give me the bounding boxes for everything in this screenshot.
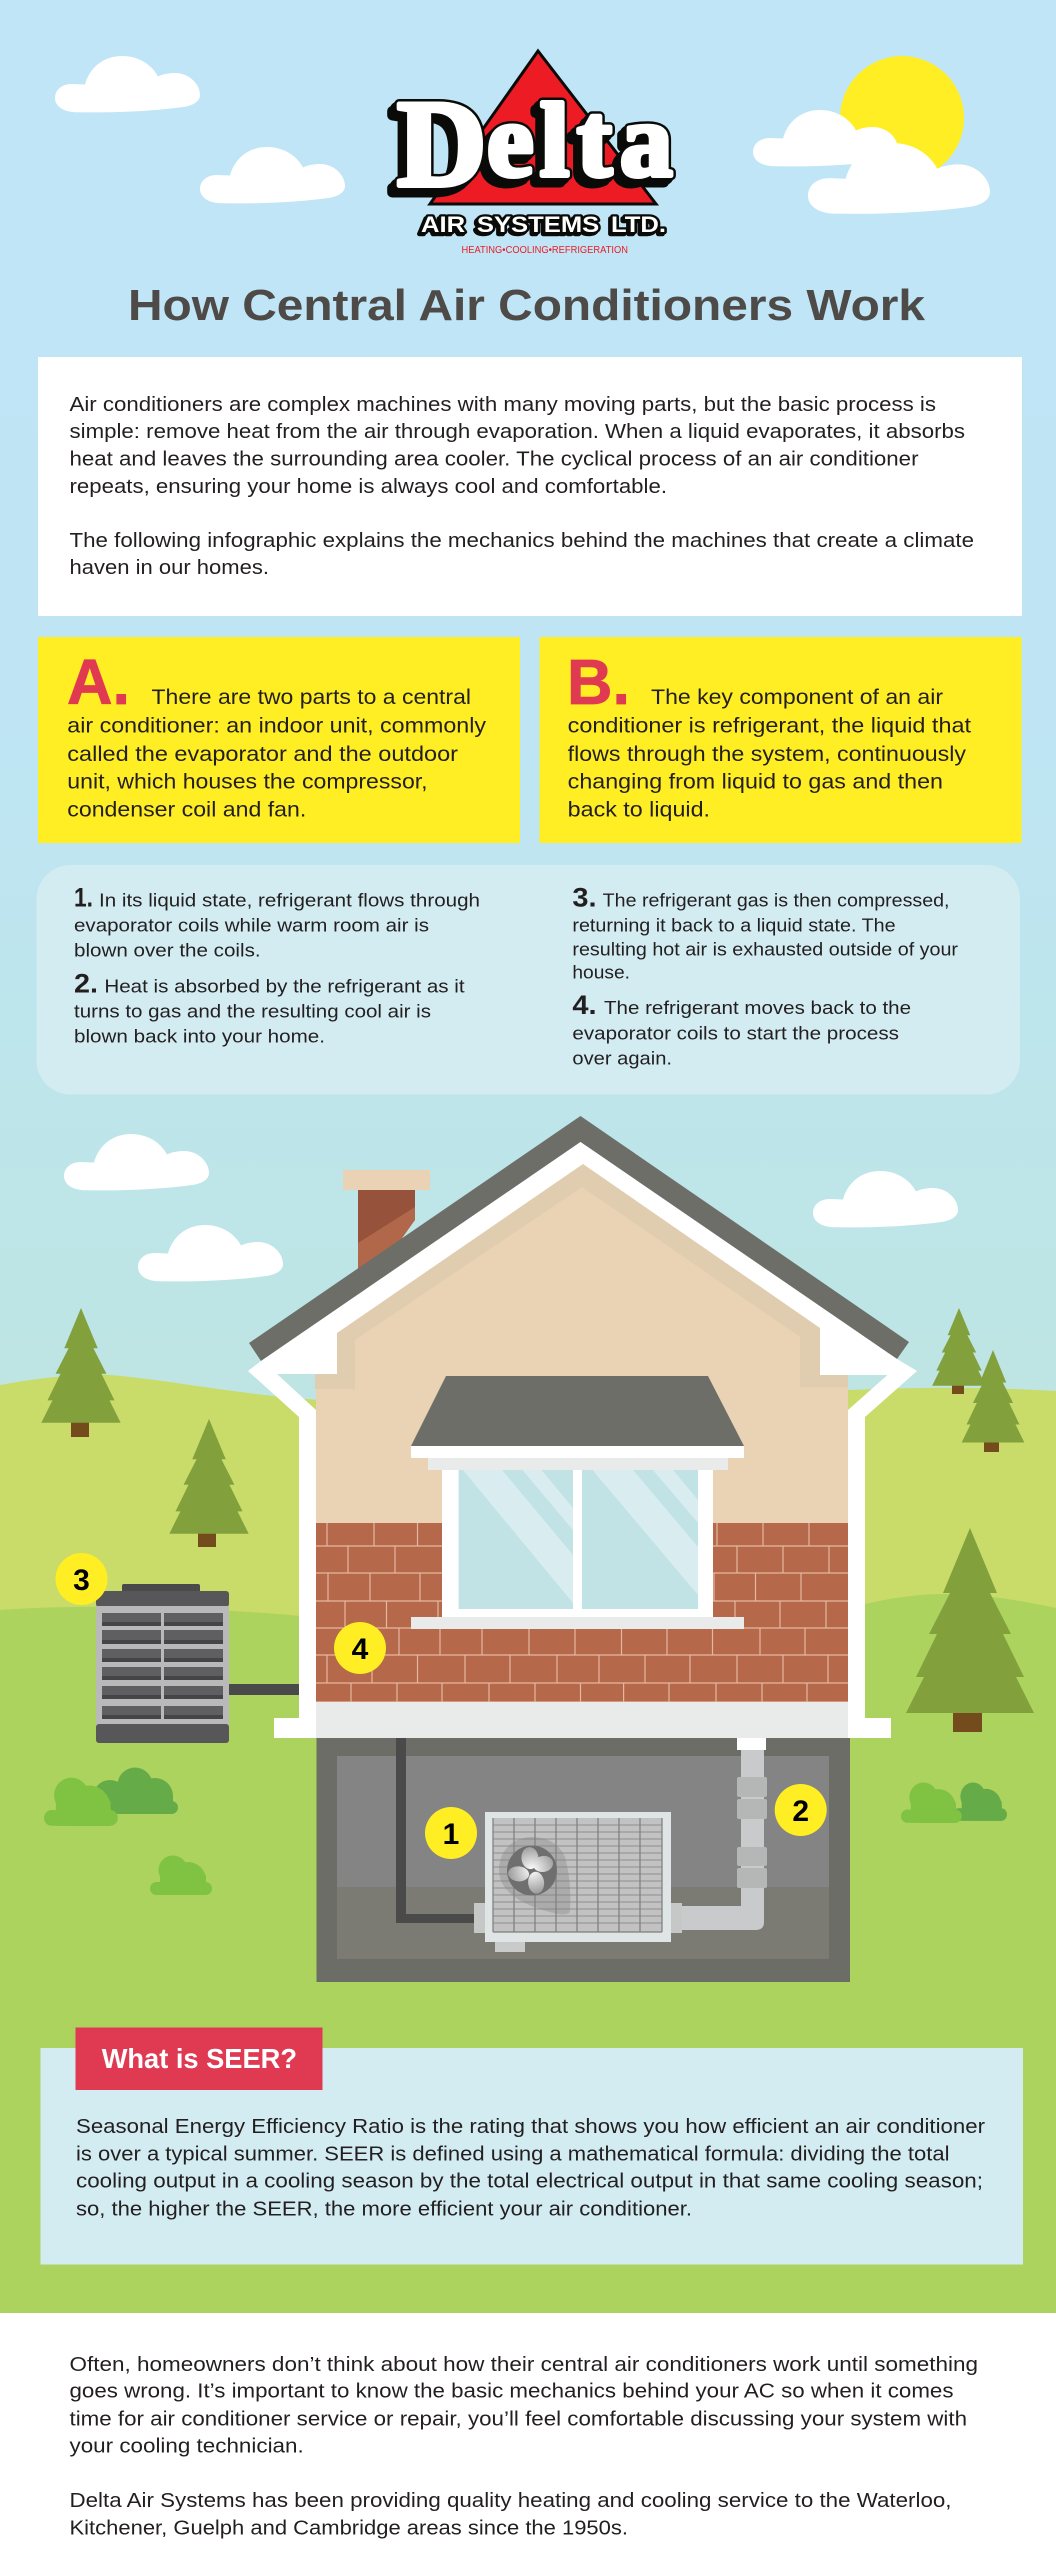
intro text: haven in our homes. bbox=[70, 557, 269, 579]
indoor evaporator unit bbox=[474, 1812, 682, 1952]
bush: right light bbox=[901, 1783, 962, 1823]
clouds: top sky bbox=[55, 56, 990, 214]
footer text: Often, homeowners don’t think about how their central air conditioners work until something bbox=[70, 2354, 978, 2376]
tree: right middle bbox=[962, 1350, 1024, 1452]
brick wall bbox=[316, 1523, 848, 1702]
text A: There are two parts to a central bbox=[152, 685, 471, 709]
panel: A bbox=[38, 637, 520, 843]
bush: small bbox=[150, 1856, 212, 1895]
window awning bbox=[411, 1376, 744, 1446]
roof bbox=[249, 1116, 909, 1361]
outdoor condenser unit bbox=[96, 1584, 229, 1743]
SEER text: Seasonal Energy Efficiency Ratio is the rating that shows you how efficient an air conditioner bbox=[76, 2116, 985, 2138]
SEER text: so, the higher the SEER, the more efficient your air conditioner. bbox=[76, 2198, 692, 2220]
tree: far left bbox=[41, 1308, 121, 1437]
SEER text: cooling output in a cooling season by the total electrical output in that same cooling season; bbox=[76, 2171, 983, 2193]
step 4 bbox=[572, 990, 911, 1068]
panel: introduction bbox=[38, 357, 1022, 616]
text B: The key component of an air bbox=[651, 685, 943, 709]
front lawn bbox=[0, 1594, 1056, 2313]
intro text: heat and leaves the surrounding area cooler. The cyclical process of an air conditioner bbox=[70, 448, 919, 470]
SEER heading tab bbox=[76, 2028, 322, 2090]
badge 4: 4 bbox=[352, 1633, 369, 1666]
chimney bbox=[343, 1170, 430, 1300]
step 1: evaporator coils while warm room air is bbox=[74, 915, 429, 936]
step 1: blown over the coils. bbox=[74, 940, 261, 961]
logo subtitle: AIR SYSTEMS LTD. bbox=[421, 212, 666, 237]
intro text: simple: remove heat from the air through evaporation. When a liquid evaporates, it absorbs bbox=[70, 421, 965, 443]
logo tagline: HEATING•COOLING•REFRIGERATION bbox=[462, 245, 628, 256]
sun bbox=[840, 56, 964, 180]
logo triangle bbox=[430, 51, 656, 204]
footer background bbox=[0, 2313, 1056, 2560]
badge 2 bbox=[775, 1784, 827, 1836]
step 3: returning it back to a liquid state. The bbox=[572, 914, 896, 935]
step 3 bbox=[572, 883, 958, 983]
step 2 bbox=[74, 969, 465, 1047]
bush: right dark bbox=[953, 1782, 1007, 1821]
intro text: Air conditioners are complex machines with many moving parts, but the basic process is bbox=[70, 394, 936, 416]
tree: left lower bbox=[169, 1419, 249, 1547]
trees bbox=[41, 1308, 1034, 1732]
panel: B bbox=[540, 637, 1022, 843]
SEER heading tab: What is SEER? bbox=[102, 2043, 297, 2074]
footer text: Kitchener, Guelph and Cambridge areas since the 1950s. bbox=[70, 2518, 628, 2540]
text A bbox=[67, 685, 486, 822]
text A: air conditioner: an indoor unit, commonly bbox=[67, 714, 486, 738]
footer text: Delta Air Systems has been providing quality heating and cooling service to the Waterloo, bbox=[70, 2490, 952, 2512]
window sill bbox=[411, 1617, 744, 1629]
step 3: resulting hot air is exhausted outside of your bbox=[572, 938, 958, 959]
bush: left light bbox=[44, 1778, 118, 1826]
sky background bbox=[0, 0, 1056, 1700]
panel: what is SEER bbox=[40, 2028, 1023, 2264]
step 4: evaporator coils to start the process bbox=[572, 1022, 899, 1043]
SEER text bbox=[76, 2116, 985, 2220]
text B bbox=[568, 685, 971, 822]
window bbox=[442, 1470, 713, 1617]
text B: back to liquid. bbox=[568, 798, 710, 822]
bush: left dark bbox=[93, 1768, 178, 1814]
white trim bbox=[248, 1142, 917, 1738]
footer text bbox=[70, 2354, 978, 2540]
step 2: turns to gas and the resulting cool air is bbox=[74, 1001, 431, 1022]
logo wordmark: Delta: elta bbox=[487, 82, 672, 198]
tree: right large bbox=[906, 1528, 1034, 1732]
letter A: A. bbox=[67, 646, 130, 718]
text B: flows through the system, continuously bbox=[568, 742, 966, 766]
badge 4 bbox=[334, 1622, 386, 1674]
step 3: 3. bbox=[572, 883, 597, 913]
back hills bbox=[0, 1375, 1056, 1700]
refrigerant line bbox=[396, 1738, 475, 1923]
badge 2: 2 bbox=[792, 1795, 809, 1828]
text A: called the evaporator and the outdoor bbox=[67, 742, 458, 766]
step 3: The refrigerant gas is then compressed, bbox=[603, 890, 950, 911]
badge 3 bbox=[56, 1553, 108, 1605]
badge 1 bbox=[425, 1807, 477, 1859]
tree: right back bbox=[932, 1308, 986, 1394]
wall bbox=[316, 1187, 848, 1525]
intro text: repeats, ensuring your home is always cool and comfortable. bbox=[70, 476, 667, 498]
intro text bbox=[70, 394, 974, 579]
foundation bbox=[316, 1702, 848, 1738]
logo bbox=[397, 51, 672, 256]
bushes bbox=[44, 1768, 1007, 1895]
text A: condenser coil and fan. bbox=[67, 798, 306, 822]
panel: process steps bbox=[36, 865, 1020, 1094]
badge 1: 1 bbox=[443, 1818, 459, 1851]
logo wordmark: Delta: D bbox=[397, 76, 487, 212]
text A: unit, which houses the compressor, bbox=[67, 770, 428, 794]
step 2: Heat is absorbed by the refrigerant as it bbox=[104, 976, 465, 997]
step 4: 4. bbox=[572, 990, 597, 1020]
intro text: The following infographic explains the mechanics behind the machines that create a climate bbox=[70, 530, 974, 552]
wall trim bbox=[315, 1164, 848, 1389]
logo wordmark: Delta: D bbox=[397, 76, 487, 212]
fan bbox=[499, 1837, 570, 1914]
SEER text: is over a typical summer. SEER is defined using a mathematical formula: dividing the total bbox=[76, 2143, 950, 2165]
step 1: In its liquid state, refrigerant flows through bbox=[99, 890, 480, 911]
footer text: time for air conditioner service or repair, you’ll feel comfortable discussing your system with bbox=[70, 2408, 967, 2430]
letter B: B. bbox=[567, 646, 630, 718]
footer text: goes wrong. It’s important to know the basic mechanics behind your AC so when it comes bbox=[70, 2381, 954, 2403]
badge 3: 3 bbox=[73, 1564, 90, 1597]
house bbox=[248, 1116, 917, 1738]
logo wordmark: Delta bbox=[397, 76, 672, 212]
step 3: house. bbox=[572, 962, 630, 983]
step 1: 1. bbox=[74, 883, 93, 913]
outdoor connecting pipe bbox=[225, 1684, 301, 1695]
step 4: The refrigerant moves back to the bbox=[604, 997, 911, 1018]
text B: conditioner is refrigerant, the liquid that bbox=[568, 714, 971, 738]
logo wordmark: Delta: elta bbox=[487, 82, 672, 198]
step 1 bbox=[74, 883, 480, 961]
white pipe bbox=[682, 1738, 767, 1930]
step 4: over again. bbox=[572, 1047, 672, 1068]
basement bbox=[316, 1738, 850, 1982]
title: How Central Air Conditioners Work bbox=[128, 281, 926, 330]
text B: changing from liquid to gas and then bbox=[568, 770, 943, 794]
footer text: your cooling technician. bbox=[70, 2435, 304, 2457]
step 2: 2. bbox=[74, 969, 98, 999]
clouds: around the house bbox=[64, 1134, 958, 1281]
step 2: blown back into your home. bbox=[74, 1026, 325, 1047]
